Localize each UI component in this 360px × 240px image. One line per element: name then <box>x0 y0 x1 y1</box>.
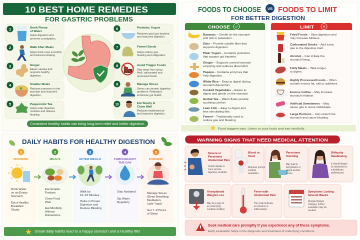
subtitle: FOR BETTER DIGESTION <box>231 16 305 22</box>
warning cards row 2: an underlying <box>207 205 222 208</box>
right remedy rows: enhances gut health. <box>137 93 162 97</box>
icon: abdominal pain <box>184 149 203 175</box>
food icons: limit <box>274 32 287 118</box>
warning cards row 1: digestive condition. <box>208 171 228 174</box>
icon: walking person <box>17 45 26 61</box>
left remedy rows: Helps digestion and <box>30 33 54 37</box>
left remedy rows: digestion. <box>30 93 42 97</box>
warning cards row 1: more serious <box>208 168 222 171</box>
habit lists: Distractions <box>45 213 61 217</box>
subtitle: FOR GASTRIC PROBLEMS <box>45 18 133 24</box>
title: FOODS TO CHOOSE <box>198 7 261 14</box>
medical care callout: Early evaluation helps in the diagnosis and treatment of underlying conditions. <box>208 229 315 233</box>
warning header <box>185 136 340 144</box>
habit lists: Chew Food <box>45 196 60 200</box>
habit lists: Walk for <box>80 190 91 194</box>
icon: vomiting woman <box>269 150 288 178</box>
icon: toilet <box>234 150 248 173</box>
habit lists: Eat a Healthy <box>11 200 29 204</box>
right remedy rows: 7 <box>116 45 118 49</box>
column: limit <box>271 23 352 123</box>
warning cards row 1: Swallowing <box>331 154 347 158</box>
footer banner: Small daily habits lead to a happy stomach and a healthy life! <box>35 230 140 234</box>
footer banner <box>4 227 176 236</box>
column: choose <box>185 23 265 123</box>
step columns: 1 <box>20 150 22 154</box>
icon: fennel seeds <box>122 46 134 56</box>
limit list: Highly Processed Foods – Often <box>290 78 337 82</box>
left remedy rows: of Water <box>30 29 43 33</box>
center stomach illustration <box>63 34 118 92</box>
step columns: THE DAY <box>118 160 133 164</box>
icon: yogurt bowl <box>122 30 135 39</box>
choose list: emptying and reduces discomfort. <box>203 64 249 68</box>
habit lists: Meditation, <box>147 198 162 202</box>
right remedy rows: 9 <box>116 82 118 86</box>
left remedy rows: Eases nausea and <box>30 67 53 71</box>
choose list: Oats – Provide soluble fiber that <box>203 42 247 46</box>
warning cards row 2: changes, further <box>308 203 325 206</box>
warning cards row 1: evaluation. <box>248 172 259 175</box>
choose list: supports digestion. <box>203 45 229 49</box>
habit lists: of Sleep <box>147 212 158 216</box>
left remedy rows: prevents constipation. <box>30 36 56 40</box>
warning cards row 1: signal another <box>286 169 301 172</box>
right remedy rows: fried, carbonated and <box>137 71 163 75</box>
step columns: EVENING <box>149 157 164 161</box>
habit lists: Helps in Proper <box>80 199 100 203</box>
title banner <box>3 3 176 15</box>
habit lists: Stay Hydrated <box>117 190 136 194</box>
icon: leaves <box>71 49 86 63</box>
choose list: help digestion. <box>203 74 223 78</box>
limit list: Carbonated Drinks – Add extra <box>290 42 334 46</box>
left remedy rows: 5 <box>9 102 11 106</box>
step columns: MORNING <box>14 157 29 161</box>
warning cards row 2: Abdominal Pain <box>254 193 276 197</box>
left remedy rows: 3 <box>9 64 11 68</box>
warning cards row 2: Weight Loss <box>207 193 225 197</box>
icon: ginger <box>16 64 28 77</box>
warning cards row 1: Could indicate a <box>208 165 225 168</box>
left remedy rows: bloating. <box>30 112 40 116</box>
warning cards row 1: May lead to <box>286 163 299 166</box>
warning cards row 2: evaluation may be <box>308 206 327 209</box>
warning cards row 1: dehydration or <box>286 166 301 169</box>
title banner: 10 BEST HOME REMEDIES <box>25 5 149 14</box>
icon: thermometer <box>240 188 247 214</box>
icon: meditating person <box>121 82 135 96</box>
choose list: and rich in potassium. <box>203 36 233 40</box>
warning cards row 1: It should always <box>331 162 348 166</box>
limit list: to digest. <box>290 70 303 74</box>
habit lists: (Deep Breathing, <box>147 194 169 198</box>
warning cards row 1: illness. <box>286 173 293 175</box>
habit lists: Drink Water <box>11 187 26 191</box>
choose list: stomach discomfort. <box>203 83 230 87</box>
right remedy rows: Prebiotic Yogurt <box>137 26 160 30</box>
right remedy rows: and improves digestion. <box>137 35 166 39</box>
icon: stomach <box>68 36 110 80</box>
warning cards row 2 <box>185 184 341 218</box>
icon: walking in park <box>78 164 102 186</box>
limit list: stomach irritation. <box>290 94 314 98</box>
choose list: Lean Fish – Easy to digest and <box>203 106 246 110</box>
warning cards row 2: Symptoms Lasting <box>308 190 334 194</box>
step columns: 4 <box>124 150 127 154</box>
habit lists: Eat Mindfully <box>45 206 62 210</box>
left remedy rows: Walk After Meals <box>30 45 54 49</box>
warning cards row 1: a healthcare <box>331 168 344 172</box>
left remedy rows: Smaller Meals <box>30 82 50 86</box>
choose list: Ginger – Supports normal stomach <box>203 60 251 64</box>
right remedy rows: Fennel Seeds <box>137 44 157 48</box>
limit list: Fried Foods – Slow digestion and <box>290 32 337 36</box>
habit lists: Sip Water <box>117 196 130 200</box>
icon: soup bowl <box>15 85 28 97</box>
icon: no trigger foods <box>122 63 133 75</box>
left remedy rows: stomach and improves <box>30 90 58 94</box>
left remedy rows: Helps food move smoothly <box>30 50 62 54</box>
left remedy rows: Helps relax digestive <box>30 106 55 110</box>
icon: peppermint <box>16 102 28 113</box>
limit list: may increase fullness. <box>290 36 320 40</box>
step columns: AFTER MEALS <box>79 157 101 161</box>
left remedy rows: Drink Plenty <box>30 26 48 30</box>
warning cards row 1: Vomiting <box>286 154 298 158</box>
right remedy rows: Helps reduce gas, <box>137 50 159 54</box>
right remedy rows: 6 <box>116 27 118 31</box>
panel: foods to choose vs limit <box>181 2 358 132</box>
medical care callout <box>185 220 357 236</box>
right remedy rows: Stress can worsen digestive <box>137 86 171 90</box>
habit lists: 10–15 Minutes <box>80 193 100 197</box>
right remedy rows: Avoid Trigger Foods <box>137 63 166 67</box>
habit lists: Well <box>45 200 51 204</box>
warning cards row 1: Blood in <box>248 150 260 154</box>
panel: home remedies <box>2 2 178 131</box>
choose list: Plain Yogurt – Contains probiotics <box>203 51 250 55</box>
warning cards row 2: Despite lifestyle <box>308 200 325 203</box>
left remedy rows: 1 <box>9 27 11 31</box>
choose header: CHOOSE <box>208 24 230 29</box>
warning cards row 1: Stool <box>248 154 255 158</box>
left remedy rows: supports healthy <box>30 70 50 74</box>
habit lists: on an Empty <box>11 190 28 194</box>
limit list: Excess Coffee – May increase <box>290 90 333 94</box>
warning cards row 2: Fever with <box>254 190 269 194</box>
warning cards row 1: professional. <box>331 172 344 174</box>
right remedy rows: 8 <box>116 64 118 68</box>
title: FOODS TO LIMIT <box>278 7 338 14</box>
habit lists: Breakfast <box>11 204 24 208</box>
footer pill <box>27 120 148 127</box>
warning cards row 2: an infection or <box>254 205 269 208</box>
habit lists: Reduce Bloating <box>80 206 102 210</box>
icon: water drop <box>115 165 135 185</box>
choose list: Papaya – Contains enzymes that <box>203 70 248 74</box>
left remedy rows: Ginger <box>30 63 41 67</box>
limit list: Fatty Meats – Take longer <box>290 66 326 70</box>
habit lists: Without <box>45 210 55 214</box>
right remedy rows: and improves digestion. <box>137 112 166 116</box>
step columns: MEALS <box>50 157 60 161</box>
habit lists <box>11 187 169 217</box>
right remedy rows: bloating and indigestion. <box>137 53 166 57</box>
limit list: Artificial Sweeteners – May <box>290 102 330 106</box>
warning cards row 2: medical condition. <box>207 208 226 211</box>
icon: plate of food <box>42 166 68 184</box>
icon: sun and water <box>8 164 30 182</box>
warning cards row 2: This could indicate <box>254 202 274 205</box>
warning cards row 1: medical <box>248 170 256 172</box>
warning cards row 2: Several Weeks <box>308 193 329 197</box>
choose list: Fennel – Traditionally used to <box>203 114 244 118</box>
limit list: stomach and cause bloating. <box>290 116 329 120</box>
warning cards row 2: needed. <box>308 210 317 212</box>
icon: meditating woman <box>147 162 169 186</box>
limit list: Large Portions – Can stretch the <box>290 112 336 116</box>
limit list: contain excess fat, salt or additives. <box>290 82 338 86</box>
choose list: Herbal Tea – Warm fluids provide <box>203 97 249 101</box>
icon: swallowing woman <box>312 150 329 178</box>
footer pill: Consistent healthy habits can bring long-term relief and better digestion. <box>30 122 145 126</box>
warning cards row 1 <box>184 146 353 182</box>
medical care callout: Seek medical care promptly if you experience any of these symptoms. <box>208 224 330 228</box>
warning header: WARNING SIGNS THAT NEED MEDICAL ATTENTION <box>197 137 328 142</box>
food icons: choose <box>188 32 200 122</box>
title <box>198 4 338 14</box>
warning cards row 1: Persistent <box>208 154 222 158</box>
title: VS <box>267 6 273 11</box>
warning cards row 1: Persistent <box>286 150 300 154</box>
right remedy rows: Restores good gut bacteria <box>137 32 170 36</box>
habit lists: Digestion and <box>80 202 98 206</box>
step columns: THROUGHOUT <box>114 157 136 161</box>
habit lists: Regularly <box>117 200 130 204</box>
right remedy rows: Eat Slowly & <box>137 101 156 105</box>
right remedy rows: problems. Relaxation <box>137 90 163 94</box>
choose list: soothing comfort. <box>203 100 227 104</box>
right remedy rows: Stay away from spicy, <box>137 68 163 72</box>
left remedy rows: 4 <box>9 83 12 87</box>
habit lists: Get 7–9 Hours <box>147 208 167 212</box>
left remedy rows: 2 <box>9 46 11 50</box>
step columns <box>6 149 173 223</box>
choose list: reduce gas and bloating. <box>203 118 237 122</box>
right remedy rows: 10 <box>115 102 119 106</box>
icon: shield check <box>93 65 108 83</box>
choose list: that support gut bacteria. <box>203 54 237 58</box>
habit lists: Light Yoga) <box>147 202 162 206</box>
habit lists: Stomach <box>11 194 23 198</box>
warning cards row 1: Abdominal Pain <box>208 158 230 162</box>
warning cards row 1: Severe or <box>208 151 222 155</box>
choose list: digest and gentle on the stomach. <box>203 92 249 96</box>
right remedy rows: Chew Well <box>137 104 152 108</box>
right remedy rows: processed foods. <box>137 74 158 78</box>
icon: scale <box>189 189 204 210</box>
habit lists: Portions <box>45 190 56 194</box>
limit list <box>290 32 338 120</box>
icon: calendar <box>289 190 304 207</box>
right remedy rows: Reduces swallowed air <box>137 108 165 112</box>
limit header: LIMIT <box>300 24 314 29</box>
right remedy rows <box>114 24 173 118</box>
warning cards row 2: May be a sign of <box>207 203 224 205</box>
step columns: 3 <box>89 150 91 154</box>
warning cards row 1: Requires prompt <box>248 166 265 169</box>
title: DAILY HABITS FOR HEALTHY DIGESTION <box>22 139 155 146</box>
right remedy rows: Manage Stress <box>137 82 159 86</box>
warning cards row 1: be assessed by <box>331 166 348 168</box>
habit lists: Slowly <box>11 208 20 212</box>
panel: warning signs <box>182 134 358 238</box>
limit list: Alcohol – Can irritate the <box>290 54 325 58</box>
left remedy rows: digestion. <box>30 73 42 77</box>
choose list <box>203 32 251 122</box>
habit lists: Eat Smaller <box>45 187 60 191</box>
choose list: Bananas – Gentle on the stomach <box>203 32 250 36</box>
choose list: less stimulating fats. <box>203 110 231 114</box>
habit lists: Manage Stress <box>147 191 167 195</box>
choose list: White Rice – Easy to digest during <box>203 80 251 84</box>
arrows between steps <box>34 175 144 179</box>
limit list: stomach lining. <box>290 58 310 62</box>
warning cards row 2: inflammation. <box>254 208 268 211</box>
limit list: cause gas in some individuals. <box>290 105 331 109</box>
left remedy rows <box>5 24 64 118</box>
step columns: 5 <box>155 150 157 154</box>
step columns: 2 <box>54 150 56 154</box>
panel: daily habits <box>2 134 178 238</box>
tip bar: Food triggers vary. Listen to your body and eat mindfully. <box>218 126 305 130</box>
left remedy rows: and reduces bloating. <box>30 53 56 57</box>
left remedy rows: Reduces pressure on the <box>30 86 61 90</box>
icon: leaves decoration <box>8 136 172 147</box>
tip bar <box>181 125 356 132</box>
icon: water glass <box>17 26 27 41</box>
limit list: gas to the digestive tract. <box>290 46 324 50</box>
warning cards row 1: Difficulty <box>331 150 344 154</box>
icon: person eating <box>124 101 136 117</box>
left remedy rows: muscles and relieves <box>30 109 56 113</box>
warning cards row 2: Unexplained <box>207 190 224 194</box>
choose list: Cooked Vegetables – Easier to <box>203 88 247 92</box>
left remedy rows: Peppermint Tea <box>30 102 53 106</box>
